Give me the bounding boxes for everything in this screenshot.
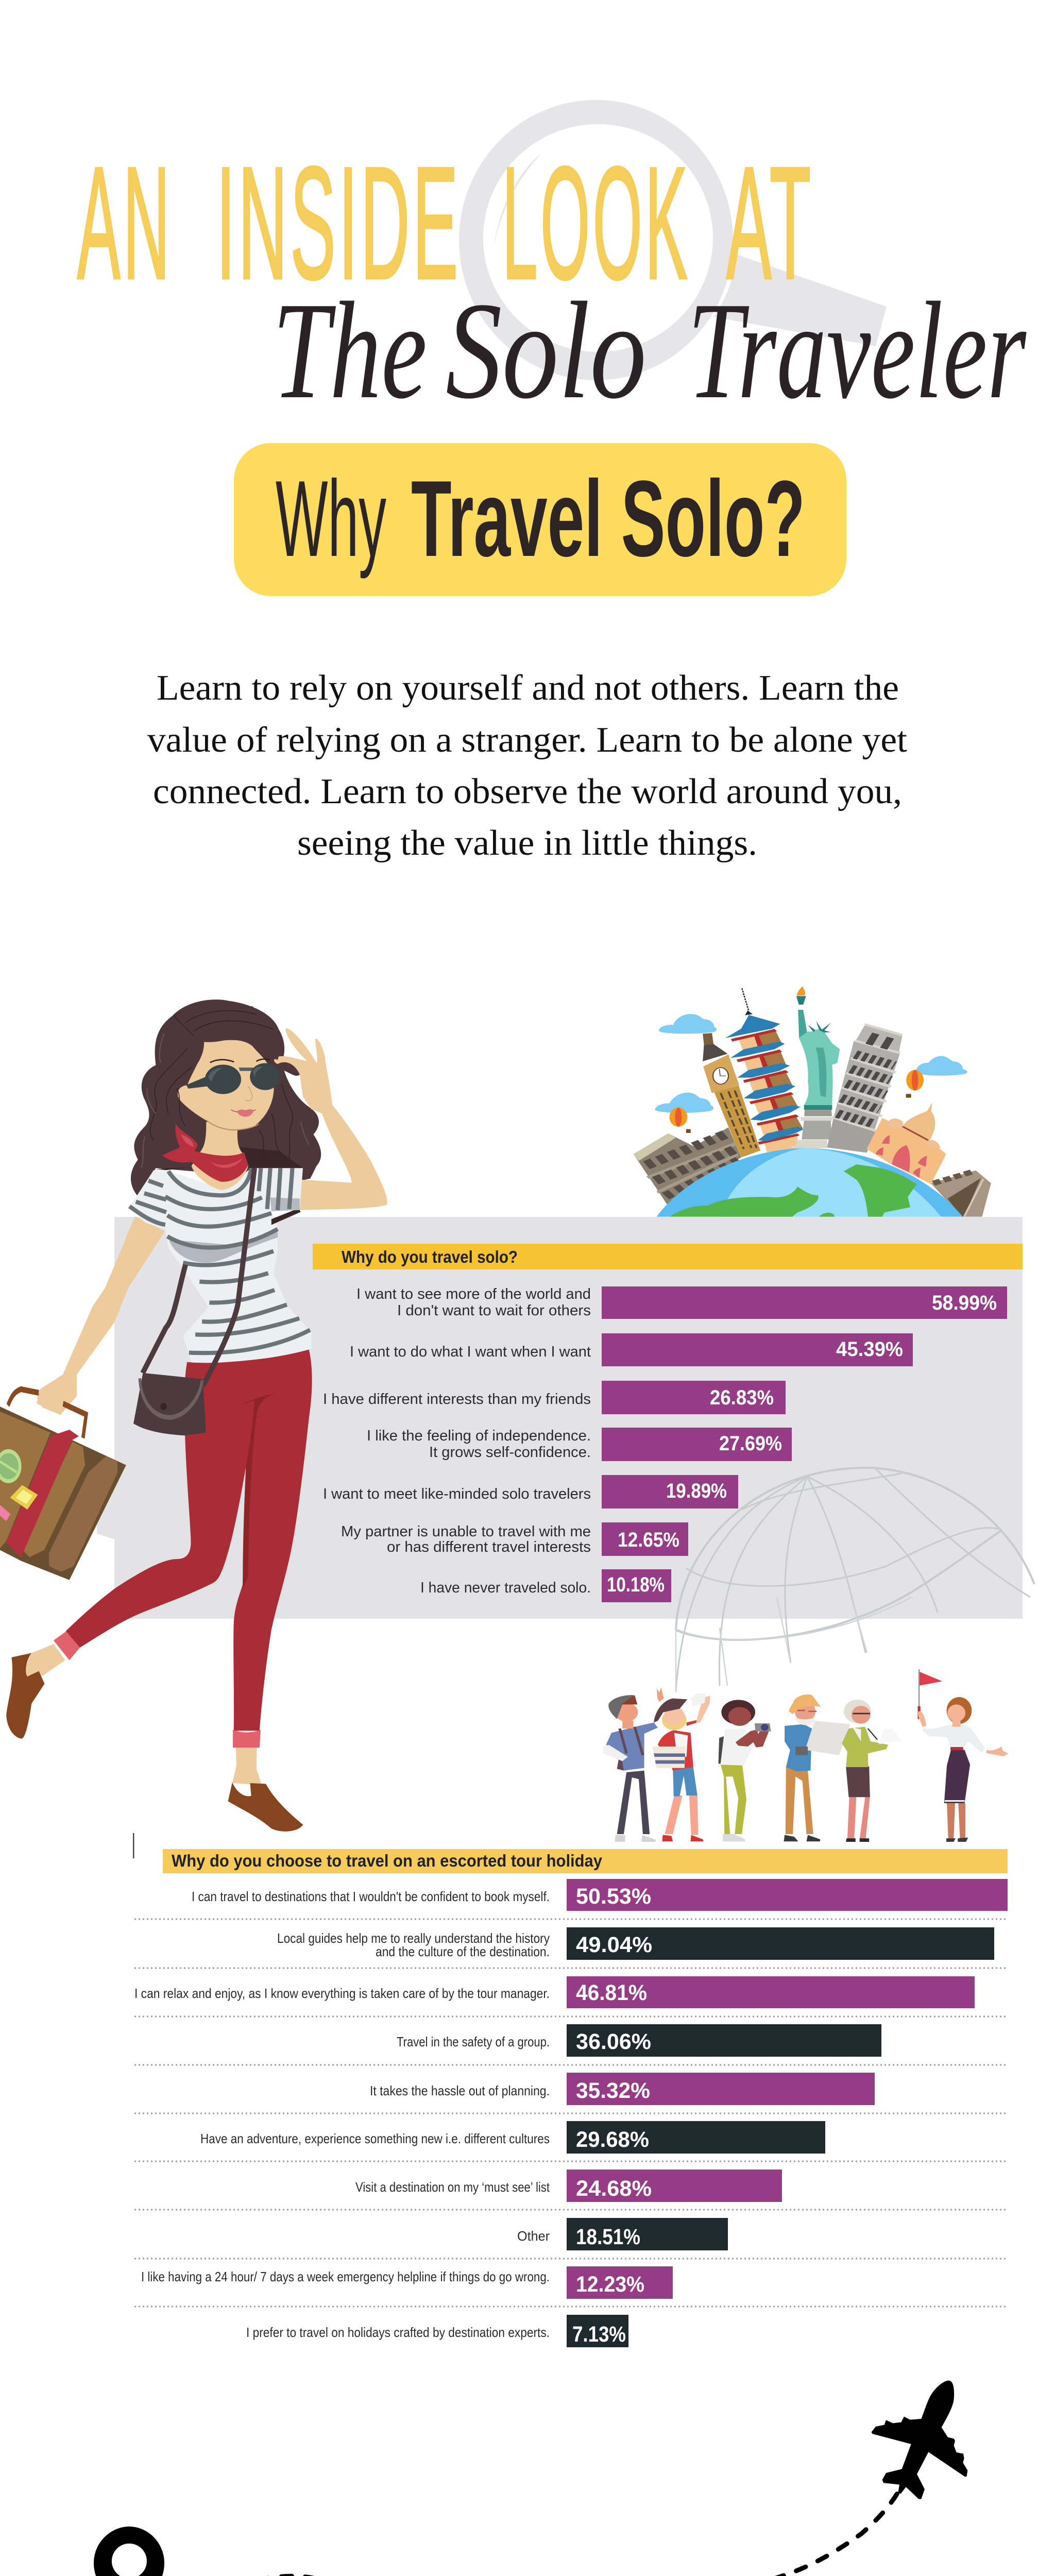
bag straps	[143, 1168, 254, 1386]
bar: safety of a group	[397, 2024, 881, 2057]
bar: hassle of planning	[370, 2073, 875, 2105]
bar: adventure	[200, 2121, 825, 2154]
bar: never traveled solo: I have never traveled solo.	[420, 1580, 591, 1596]
text block: intro paragraph	[147, 668, 908, 863]
chart header	[163, 1849, 1008, 1873]
bar: like-minded travelers	[323, 1475, 738, 1509]
bar: partner unable	[341, 1522, 688, 1556]
bar: partner unable: or has different travel interests	[387, 1539, 591, 1555]
bar: local guides: and the culture of the destination.	[376, 1944, 550, 1959]
arrow: dashed flight path	[129, 2486, 901, 2576]
bar: see more of the world: I don't want to wait for others	[397, 1302, 591, 1319]
legs and trousers	[6, 1346, 312, 1832]
text block: intro paragraph: connected. Learn to observe the world around you,	[153, 772, 902, 811]
bar: confident to book: 50.53%	[576, 1884, 651, 1909]
bar: partner unable: My partner is unable to travel with me	[341, 1523, 591, 1540]
bar: local guides: Local guides help me to really understand the history	[277, 1930, 550, 1946]
text block: intro paragraph: seeing the value in little things.	[297, 823, 757, 863]
bar: emergency helpline	[141, 2266, 673, 2299]
bar: emergency helpline: 12.23%	[576, 2272, 644, 2297]
text: AT	[726, 133, 814, 312]
bar: safety of a group: 36.06%	[576, 2029, 651, 2054]
bar: confident to book	[192, 1879, 1008, 1911]
heading: why travel solo: Travel Solo?	[411, 458, 805, 579]
bar: partner unable: 12.65%	[618, 1529, 679, 1551]
suitcase	[0, 1389, 126, 1580]
bar: relax and enjoy: 46.81%	[576, 1980, 647, 2005]
bar: different interests	[323, 1381, 786, 1414]
bar: do what I want: 45.39%	[836, 1338, 903, 1361]
scarf	[162, 1124, 248, 1182]
sunglasses	[186, 1063, 280, 1094]
bar: relax and enjoy: I can relax and enjoy, as I know everything is taken care of by the tour manager.	[134, 1986, 550, 2001]
bar chart: why choose an escorted tour	[134, 1849, 1008, 2347]
left arm	[37, 1216, 165, 1414]
landmark: leaning tower	[827, 1023, 903, 1153]
bar: like-minded travelers: 19.89%	[666, 1480, 727, 1502]
bar: must see list: 24.68%	[576, 2176, 652, 2201]
bar: different interests: 26.83%	[710, 1386, 774, 1409]
stray vertical rule	[133, 1833, 134, 1858]
crossbody bag	[133, 1373, 206, 1435]
shirt	[129, 1168, 311, 1363]
icon: clouds	[655, 1014, 967, 1113]
face	[178, 1040, 274, 1130]
title: the solo traveler	[273, 274, 1028, 428]
bar: destination experts: I prefer to travel on holidays crafted by destination experts.	[246, 2325, 550, 2340]
bar: see more of the world	[356, 1286, 1007, 1319]
bar: local guides	[277, 1927, 994, 1960]
icon: earth globe	[657, 1148, 963, 1217]
illustration: tour group	[603, 1669, 1008, 1842]
chart header	[313, 1244, 1023, 1269]
icon: magnifying glass	[459, 100, 887, 380]
bar: must see list: Visit a destination on my ‘must see’ list	[355, 2179, 550, 2195]
bar chart: why do you travel solo	[313, 1244, 1023, 1602]
landmark: clock tower	[703, 1033, 760, 1158]
illustration: woman traveler	[0, 999, 387, 1832]
heading: why travel solo	[234, 443, 846, 596]
bar: never traveled solo	[420, 1569, 671, 1602]
bar: independence	[367, 1428, 792, 1461]
bar: do what I want	[350, 1333, 913, 1366]
bar: must see list	[355, 2170, 782, 2202]
icon: airplane	[872, 2381, 967, 2499]
title: an inside look at: AN	[77, 133, 173, 312]
eyebrows, nose and mouth	[210, 1059, 269, 1117]
bar: independence: 27.69%	[719, 1432, 782, 1455]
torso, head and raised arm	[129, 999, 387, 1363]
title: an inside look at: INSIDE	[216, 133, 461, 312]
bar: like-minded travelers: I want to meet like-minded solo travelers	[323, 1486, 591, 1502]
landmark: pyramid	[931, 1171, 991, 1217]
person: woman with notepad	[842, 1700, 901, 1842]
landmark: colosseum	[634, 1127, 741, 1204]
title: the solo traveler: Solo	[446, 274, 646, 428]
icon: wireframe globe	[676, 1468, 1034, 1691]
bar: destination experts: 7.13%	[572, 2322, 626, 2347]
bar: other	[517, 2218, 728, 2250]
bar: independence: It grows self-confidence.	[429, 1444, 591, 1461]
bar: adventure: Have an adventure, experience something new i.e. different cultures	[200, 2131, 550, 2146]
heading: why travel solo: Why	[276, 458, 386, 579]
landmark: taj mahal	[867, 1103, 946, 1184]
hair back	[131, 999, 321, 1196]
bar: different interests: I have different interests than my friends	[323, 1391, 591, 1408]
bar: other: 18.51%	[576, 2225, 640, 2249]
bar: confident to book: I can travel to destinations that I wouldn't be confident to book myself.	[192, 1889, 550, 1904]
chart header: Why do you travel solo?	[342, 1247, 518, 1266]
bar: emergency helpline: I like having a 24 hour/ 7 days a week emergency helpline if things do go wrong.	[141, 2269, 550, 2284]
text block: intro paragraph: Learn to rely on yourself and not others. Learn the	[157, 668, 899, 708]
hair fringe	[156, 1006, 283, 1072]
person: man with backpack	[603, 1687, 664, 1842]
title: an inside look at: LOOK	[502, 133, 690, 312]
person: woman with camera	[719, 1700, 771, 1841]
bar: other: Other	[517, 2228, 550, 2244]
icon: hot air balloons	[670, 1070, 924, 1133]
finger over hair	[278, 1062, 300, 1076]
bar: independence: I like the feeling of independence.	[367, 1428, 591, 1444]
text block: intro paragraph: value of relying on a stranger. Learn to be alone yet	[147, 720, 908, 760]
landmark: pagoda	[725, 988, 804, 1153]
bar: adventure: 29.68%	[576, 2127, 649, 2152]
bar: never traveled solo: 10.18%	[607, 1573, 665, 1596]
illustration: world landmarks on globe	[634, 986, 991, 1217]
bar: see more of the world: I want to see more of the world and	[356, 1286, 591, 1302]
bar: hassle of planning: It takes the hassle out of planning.	[370, 2083, 550, 2098]
bar: safety of a group: Travel in the safety of a group.	[397, 2034, 550, 2049]
title: the solo traveler: The	[273, 274, 427, 428]
bar: relax and enjoy	[134, 1976, 975, 2008]
person: woman taking selfie	[652, 1693, 710, 1841]
bar: destination experts	[246, 2315, 628, 2347]
bar: do what I want: I want to do what I want when I want	[350, 1344, 591, 1360]
landmark: statue of liberty	[791, 986, 840, 1148]
person: old man with map	[784, 1694, 850, 1841]
panel: why do you travel solo	[97, 1217, 1034, 1691]
chart header: Why do you choose to travel on an escorted tour holiday	[172, 1851, 603, 1870]
bar: local guides: 49.04%	[576, 1933, 652, 1957]
bar: hassle of planning: 35.32%	[576, 2078, 650, 2103]
person: tour guide with flag	[917, 1669, 1008, 1842]
globe wireframe tails	[676, 1597, 912, 1692]
bar: see more of the world: 58.99%	[932, 1292, 997, 1314]
icon: location pin	[94, 2527, 164, 2576]
neck	[192, 1122, 248, 1190]
raised arm and hand	[274, 1028, 387, 1210]
